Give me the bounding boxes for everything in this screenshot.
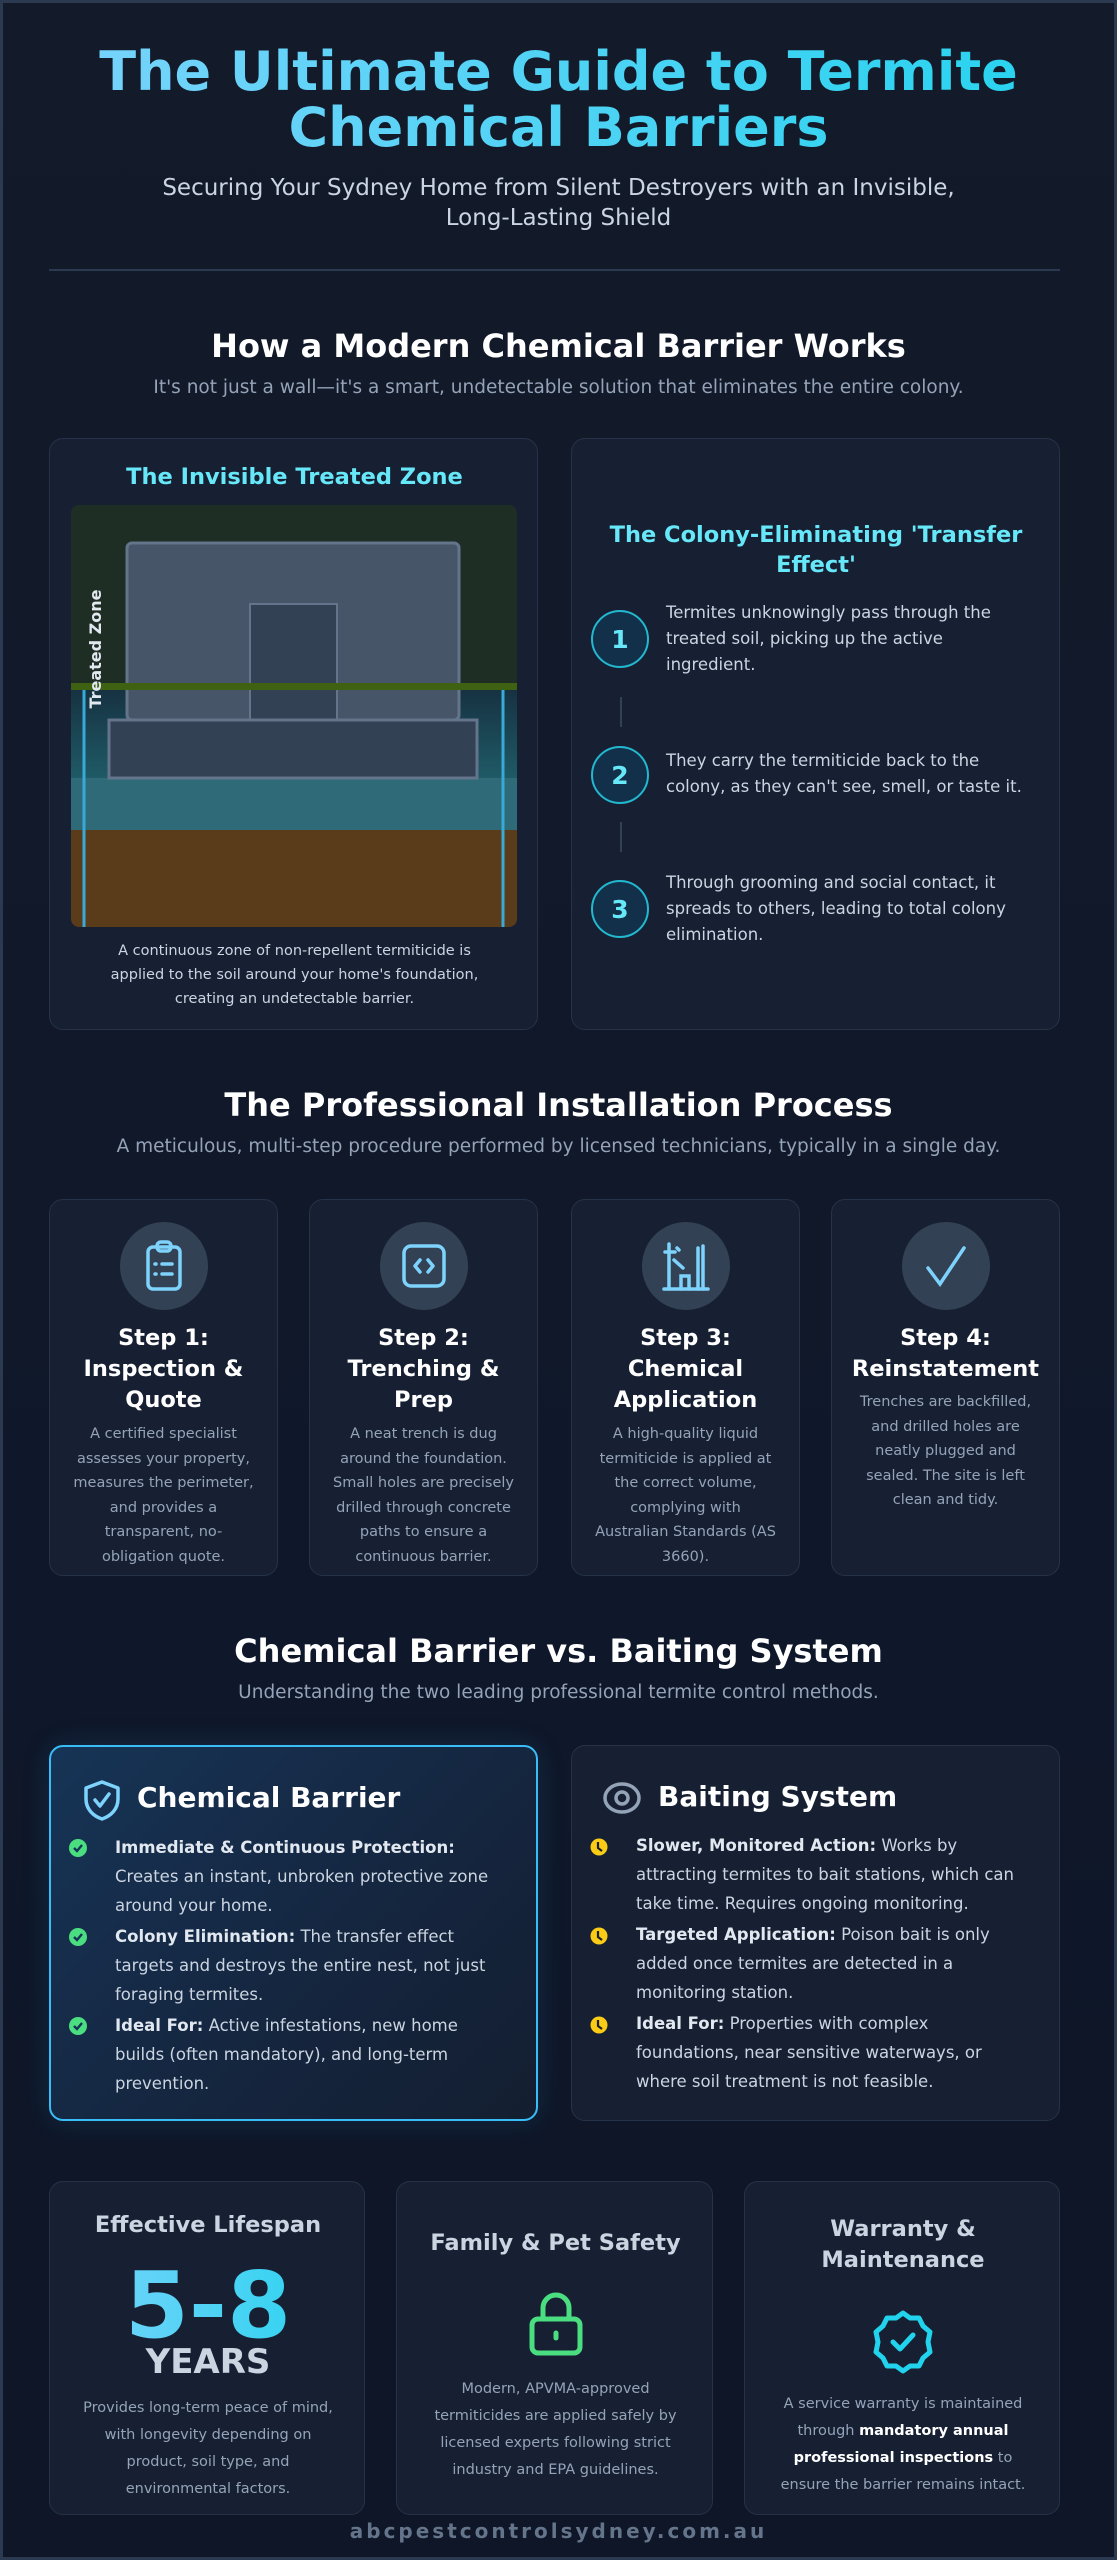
card title: Effective Lifespan bbox=[95, 2212, 321, 2238]
panel title: The Invisible Treated Zone bbox=[126, 464, 463, 490]
step 1 text: Termites unknowingly pass through the treated soil, picking up the active ingredient. bbox=[666, 603, 991, 674]
item: Ideal For: Active infestations, new home builds (often mandatory), and long-term prevention. bbox=[115, 2016, 458, 2093]
step 2: 2 bbox=[611, 760, 629, 790]
card: step 4 bbox=[831, 1199, 1060, 1576]
diagram: treated zone: Treated Zone bbox=[86, 589, 105, 709]
step 3 text: Through grooming and social contact, it spreads to others, leading to total colony elimination. bbox=[666, 873, 1006, 944]
step text: A certified specialist assesses your property, measures the perimeter, and provides a transparent, no-obligation quote. bbox=[73, 1426, 254, 1564]
heading: Chemical Barrier bbox=[137, 1781, 400, 1814]
step title: Prep bbox=[394, 1387, 453, 1413]
description: A service warranty is maintained through mandatory annual professional inspections to ensure the barrier remains intact. bbox=[781, 2396, 1025, 2493]
icon: code box bbox=[380, 1222, 468, 1310]
title: The Ultimate Guide to Termite bbox=[99, 40, 1018, 103]
step title bbox=[614, 1325, 757, 1413]
section subtitle: Understanding the two leading professional termite control methods. bbox=[238, 1682, 879, 1703]
card title: Maintenance bbox=[821, 2247, 985, 2273]
item: Ideal For: Properties with complex foundations, near sensitive waterways, or where soil treatment is not feasible. bbox=[636, 2014, 982, 2091]
icon: shield bbox=[84, 1780, 120, 1821]
step title bbox=[348, 1325, 499, 1413]
panel: chemical barrier bbox=[49, 1745, 538, 2121]
step text: A high-quality liquid termiticide is applied at the correct volume, complying with Australian Standards (AS 3660). bbox=[595, 1426, 776, 1564]
step 1: 1 bbox=[611, 624, 629, 654]
step 2 text bbox=[666, 751, 1022, 796]
step title: Chemical bbox=[628, 1356, 743, 1382]
card: warranty bbox=[744, 2181, 1060, 2515]
section heading: how it works: How a Modern Chemical Barrier Works bbox=[211, 327, 906, 365]
step title: Step 1: bbox=[118, 1325, 209, 1351]
panel: invisible treated zone bbox=[49, 438, 538, 1030]
unit: YEARS bbox=[146, 2342, 270, 2382]
panel: baiting system bbox=[571, 1745, 1060, 2121]
card title: Family & Pet Safety bbox=[430, 2230, 681, 2256]
step title: Application bbox=[614, 1387, 757, 1413]
card title: Warranty & bbox=[830, 2216, 976, 2242]
diagram: treated zone bbox=[71, 505, 517, 927]
item: Colony Elimination: The transfer effect targets and destroys the entire nest, not just foraging termites. bbox=[115, 1927, 485, 2004]
card: step 3 bbox=[571, 1199, 800, 1576]
step title: Step 3: bbox=[640, 1325, 731, 1351]
step title bbox=[852, 1325, 1039, 1382]
panel title: transfer effect: The Colony-Eliminating 'Transfer Effect' bbox=[610, 522, 1022, 578]
icon: clipboard bbox=[120, 1222, 208, 1310]
step title bbox=[84, 1325, 243, 1413]
card: step 1 bbox=[49, 1199, 278, 1576]
icon: lock bbox=[530, 2292, 582, 2356]
step title: Inspection & bbox=[84, 1356, 243, 1382]
step title: Quote bbox=[125, 1387, 202, 1413]
step 2 bbox=[591, 746, 649, 804]
section subtitle: It's not just a wall—it's a smart, undetectable solution that eliminates the entire colony. bbox=[153, 377, 964, 398]
section heading: comparison: Chemical Barrier vs. Baiting System bbox=[234, 1632, 883, 1670]
section subtitle: A meticulous, multi-step procedure performed by licensed technicians, typically in a single day. bbox=[117, 1136, 1000, 1157]
caption: A continuous zone of non-repellent termiticide is applied to the soil around your home's foundation, creating an undetectable barrier. bbox=[111, 943, 478, 1007]
card title bbox=[821, 2216, 985, 2273]
icon: check bbox=[902, 1222, 990, 1310]
step title: Trenching & bbox=[348, 1356, 499, 1382]
big number: 5-8 bbox=[125, 2252, 291, 2359]
card: step 2 bbox=[309, 1199, 538, 1576]
title: Chemical Barriers bbox=[288, 96, 828, 159]
step text: Trenches are backfilled, and drilled holes are neatly plugged and sealed. The site is left clean and tidy. bbox=[860, 1394, 1031, 1508]
section heading: installation: The Professional Installation Process bbox=[224, 1086, 893, 1124]
icon: badge bbox=[874, 2310, 932, 2374]
step title: Step 4: bbox=[900, 1325, 991, 1351]
step 3 bbox=[591, 880, 649, 938]
icon: application bbox=[642, 1222, 730, 1310]
card: family & pet safety bbox=[396, 2181, 713, 2515]
icon: eye bbox=[603, 1782, 641, 1814]
card: effective lifespan bbox=[49, 2181, 365, 2515]
title bbox=[0, 44, 1117, 156]
step 2 text: They carry the termiticide back to the bbox=[666, 751, 979, 770]
item: Slower, Monitored Action: Works by attracting termites to bait stations, which can take time. Requires ongoing monitoring. bbox=[636, 1836, 1014, 1913]
heading: Baiting System bbox=[658, 1780, 897, 1813]
step text: A neat trench is dug around the foundation. Small holes are precisely drilled through concrete paths to ensure a continuous barrier. bbox=[333, 1426, 514, 1564]
step 2 text: colony, as they can't see, smell, or taste it. bbox=[666, 777, 1022, 796]
step title: Reinstatement bbox=[852, 1356, 1039, 1382]
footer: abcpestcontrolsydney.com.au bbox=[350, 2519, 767, 2543]
description: Modern, APVMA-approved termiticides are applied safely by licensed experts following strict industry and EPA guidelines. bbox=[434, 2381, 677, 2478]
item: Targeted Application: Poison bait is only added once termites are detected in a monitoring station. bbox=[636, 1925, 990, 2002]
step 1 bbox=[591, 610, 649, 668]
step title: Step 2: bbox=[378, 1325, 469, 1351]
item: Immediate & Continuous Protection: Creates an instant, unbroken protective zone around your home. bbox=[115, 1838, 488, 1915]
description: Provides long-term peace of mind, with longevity depending on product, soil type, and environmental factors. bbox=[83, 2400, 333, 2497]
step 3: 3 bbox=[611, 894, 629, 924]
subtitle: Securing Your Sydney Home from Silent Destroyers with an Invisible, Long-Lasting Shield bbox=[162, 175, 955, 231]
big number bbox=[50, 2256, 366, 2356]
panel: transfer effect bbox=[571, 438, 1060, 1030]
